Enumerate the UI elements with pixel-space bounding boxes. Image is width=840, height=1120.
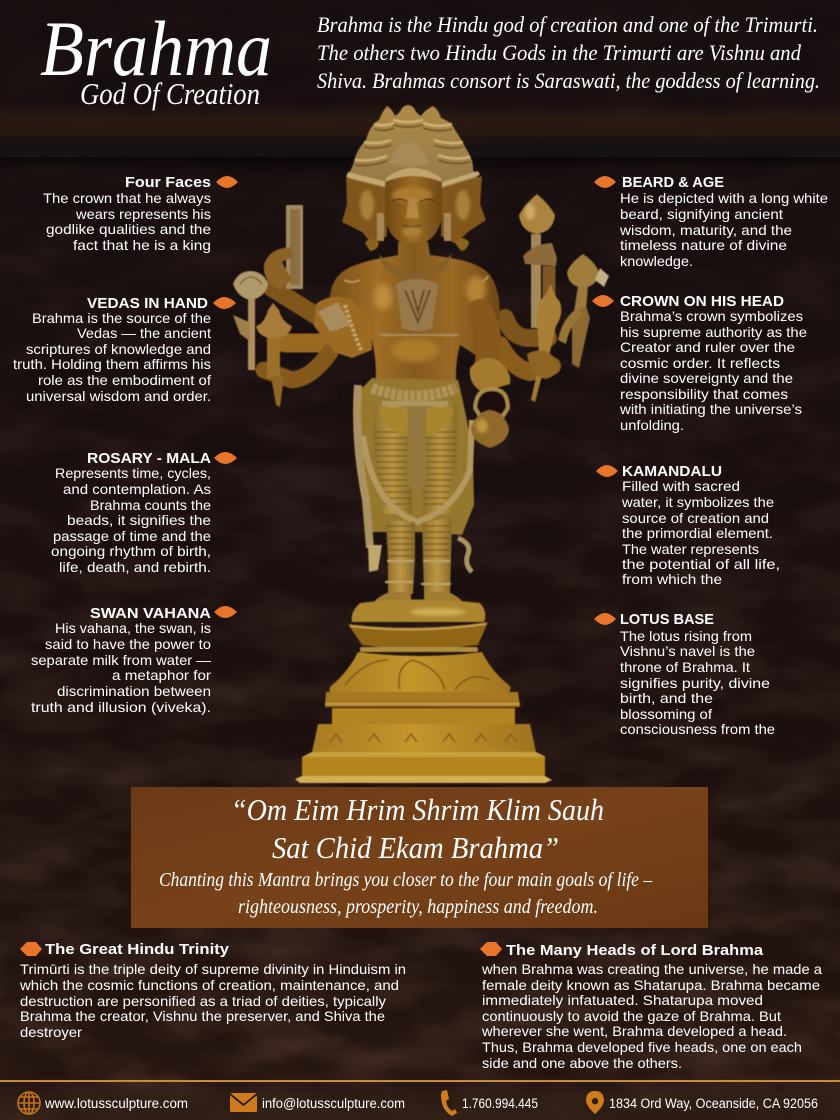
text block: knowledge.	[620, 254, 693, 269]
text block: unfolding.	[620, 418, 684, 433]
front right arm	[480, 312, 489, 372]
text block: a metaphor for	[112, 668, 211, 683]
text block: his supreme authority as the	[620, 325, 807, 340]
mantra description	[159, 869, 653, 918]
kamandalu water pot	[470, 358, 510, 448]
mantra text	[231, 792, 604, 865]
text block	[619, 309, 807, 433]
address: 1834 Ord Way, Oceanside, CA 92056	[609, 1096, 818, 1111]
text block: Creator and ruler over the	[620, 340, 795, 355]
right callout: Kamandalu	[596, 463, 780, 587]
mantra description: righteousness, prosperity, happiness and freedom.	[238, 896, 598, 918]
text block: beard, signifying ancient	[620, 207, 783, 222]
intro paragraph: The others two Hindu Gods in the Trimurti are Vishnu and	[317, 40, 802, 65]
text block: cosmic order. It reflects	[620, 356, 780, 371]
panel background	[131, 787, 708, 928]
left callout: Swan Vahana	[31, 605, 237, 715]
phone number: 1.760.994.445	[462, 1096, 538, 1111]
text block: consciousness from the	[620, 722, 775, 737]
text block: truth and illusion (viveka).	[31, 700, 211, 715]
title: Brahma: Brahma	[40, 5, 272, 92]
intro paragraph	[317, 12, 820, 93]
email: info@lotussculpture.com	[262, 1096, 405, 1111]
text block: which the cosmic functions of creation, maintenance, and	[19, 978, 399, 993]
text block	[31, 621, 211, 715]
text block: life, death, and rebirth.	[59, 560, 211, 575]
lower garment and sash	[357, 378, 474, 572]
website: www.lotussculpture.com	[44, 1096, 188, 1111]
text block: blossoming of	[620, 707, 712, 722]
lotus pedestal	[295, 600, 552, 783]
text block	[621, 479, 780, 587]
icon: lotus petal	[213, 297, 236, 309]
icon: phone	[441, 1090, 457, 1116]
text block: Trimūrti is the triple deity of supreme divinity in Hinduism in	[20, 962, 406, 977]
central crown crest	[386, 141, 441, 184]
text block	[620, 629, 775, 737]
heading: CROWN ON HIS HEAD	[620, 293, 784, 310]
left callout: Rosary - Mala	[51, 450, 237, 575]
text block: side and one above the others.	[482, 1056, 682, 1071]
text block: Represents time, cycles,	[55, 466, 211, 481]
text block: discrimination between	[57, 684, 211, 699]
heading: SWAN VAHANA	[90, 605, 211, 622]
mantra panel	[131, 787, 708, 928]
text block: source of creation and	[622, 511, 769, 526]
text block: wears represents his	[75, 207, 211, 222]
icon: lotus petal	[592, 295, 614, 307]
text block: fact that he is a king	[73, 238, 211, 253]
text block: wherever she went, Brahma developed a head.	[481, 1024, 787, 1039]
text block: birth, and the	[620, 691, 713, 706]
text block: signifies purity, divine	[620, 676, 770, 691]
text block	[19, 962, 406, 1040]
text block: wisdom, maturity, and the	[619, 223, 792, 238]
icon: lotus petal	[594, 613, 616, 625]
right hands with mace, conch and axe	[500, 194, 609, 402]
text block: and contemplation. As	[63, 482, 211, 497]
icon: lotus petal	[596, 465, 618, 477]
section: The Many Heads of Lord Brahma	[480, 942, 822, 1071]
text block: destroyer	[20, 1025, 82, 1040]
text block: water, it symbolizes the	[621, 495, 774, 510]
text block: timeless nature of divine	[620, 238, 787, 253]
text block: the primordial element.	[622, 526, 773, 541]
text block	[481, 962, 822, 1071]
text block: He is depicted with a long white	[620, 191, 828, 206]
text block: truth. Holding them affirms his	[13, 357, 211, 372]
text block: The crown that he always	[43, 191, 211, 206]
icon: globe	[18, 1092, 40, 1114]
text block: godlike qualities and the	[46, 222, 211, 237]
front hand with rosary	[314, 297, 372, 358]
heading: KAMANDALU	[622, 463, 722, 480]
statue of Brahma	[233, 105, 609, 783]
text block: Filled with sacred	[622, 479, 740, 494]
icon: map pin	[586, 1091, 604, 1114]
text block: separate milk from water —	[31, 653, 211, 668]
side faces and crowns	[342, 105, 486, 244]
text block	[619, 191, 828, 269]
text block: destruction are personified as a triad of deities, typically	[20, 994, 386, 1009]
icon: envelope	[230, 1093, 257, 1112]
left hands with book, lotus and trident	[233, 205, 330, 407]
icon: lotus petal	[20, 942, 42, 956]
heading: BEARD & AGE	[622, 174, 724, 191]
text block: His vahana, the swan, is	[55, 621, 211, 636]
text block: from which the	[622, 572, 722, 587]
text block: role as the embodiment of	[38, 373, 211, 388]
legs and feet	[372, 518, 464, 605]
text block: female deity known as Shatarupa. Brahma became	[482, 978, 820, 993]
text block: Vishnu’s navel is the	[620, 644, 755, 659]
text block: passage of time and the	[53, 529, 211, 544]
text block: scriptures of knowledge and	[26, 342, 211, 357]
mantra text: Sat Chid Ekam Brahma”	[272, 830, 559, 865]
text block: Vedas — the ancient	[77, 326, 211, 341]
mantra description: Chanting this Mantra brings you closer to the four main goals of life –	[159, 869, 653, 891]
left callout: Vedas in Hand	[13, 295, 236, 404]
text block	[51, 466, 211, 575]
icon: lotus petal	[480, 942, 502, 956]
heading: The Many Heads of Lord Brahma	[506, 942, 764, 959]
mantra text: “Om Eim Hrim Shrim Klim Sauh	[231, 792, 604, 827]
text block: continuously to avoid the gaze of Brahma. But	[482, 1009, 781, 1024]
text block: responsibility that comes	[620, 387, 788, 402]
text block: the potential of all life,	[622, 557, 780, 572]
right callout: Crown on His Head	[592, 293, 807, 433]
heading: VEDAS IN HAND	[87, 295, 208, 312]
text block: divine sovereignty and the	[620, 371, 793, 386]
text block: immediately infatuated. Shatarupa moved	[482, 993, 763, 1008]
heading: The Great Hindu Trinity	[45, 941, 230, 958]
text block: Brahma’s crown symbolizes	[620, 309, 803, 324]
heading: LOTUS BASE	[620, 611, 714, 628]
central face	[365, 176, 469, 251]
right callout: Lotus Base	[594, 611, 775, 737]
left callout: Four Faces	[43, 174, 238, 253]
title block	[40, 5, 272, 111]
text block: Brahma is the source of the	[32, 311, 211, 326]
text block: with initiating the universe’s	[619, 402, 802, 417]
right callout: Beard & Age	[594, 174, 828, 269]
text block: said to have the power to	[45, 637, 211, 652]
text block: The lotus rising from	[620, 629, 752, 644]
text block	[13, 311, 211, 404]
text block: Thus, Brahma developed five heads, one on each	[482, 1040, 802, 1055]
text block	[43, 191, 211, 253]
text block: ongoing rhythm of birth,	[51, 544, 211, 559]
footer contact bar	[0, 1080, 840, 1116]
text block: throne of Brahma. It	[620, 660, 750, 675]
icon: lotus petal	[214, 606, 237, 618]
torso and shoulders	[330, 242, 500, 380]
heading: ROSARY - MALA	[87, 450, 211, 467]
heading: Four Faces	[125, 174, 211, 191]
text block: when Brahma was creating the universe, he made a	[481, 962, 822, 977]
icon: lotus petal	[594, 176, 616, 188]
text block: Brahma the creator, Vishnu the preserver, and Shiva the	[20, 1009, 385, 1024]
section: The Great Hindu Trinity	[19, 941, 406, 1040]
text block: Brahma counts the	[90, 498, 211, 513]
icon: lotus petal	[216, 176, 238, 188]
subtitle: God Of Creation: God Of Creation	[80, 76, 260, 111]
text block: beads, it signifies the	[67, 513, 211, 528]
icon: lotus petal	[214, 452, 237, 464]
text block: universal wisdom and order.	[26, 389, 211, 404]
text block: The water represents	[622, 542, 759, 557]
